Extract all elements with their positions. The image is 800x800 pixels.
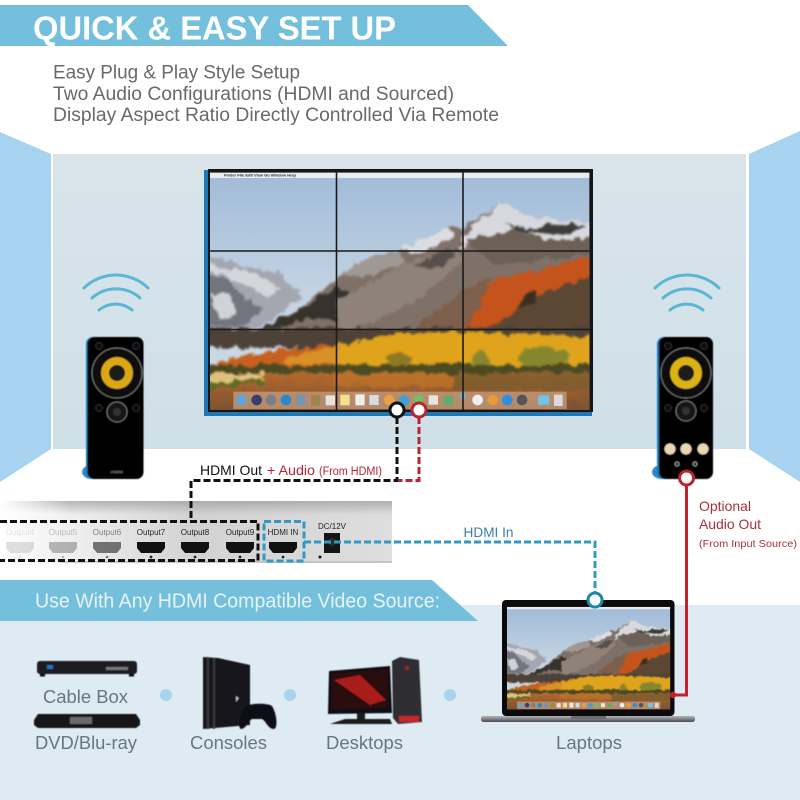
feature list: Display Aspect Ratio Directly Controlled Via Remote [53,105,499,126]
output ports: HDMI IN [268,528,299,537]
icon: right wireless signal [655,275,719,310]
label: laptops: Laptops [556,733,622,753]
output ports: Output7 [137,528,166,537]
connector: laptop HDMI node [588,593,602,607]
bottom panel [0,605,800,800]
output ports: Output9 [226,528,255,537]
label: optional audio out: (From Input Source) [699,538,797,550]
connector: audio node [412,403,426,417]
HDMI switch [0,501,392,563]
label: HDMI out plus audio: HDMI Out [200,462,262,478]
label: desktops: Desktops [326,733,403,753]
left speaker: creative [111,470,123,474]
separator dot [160,689,172,701]
title: QUICK & EASY SET UP [33,10,396,48]
icon: DVD player [34,714,140,728]
icon: desktop computer [328,657,422,724]
feature list: Easy Plug & Play Style Setup [53,62,300,84]
menu bar text: Finder File Edit View Go Window Help [224,172,296,178]
optional audio wiring [673,485,686,695]
feature list: Two Audio Configurations (HDMI and Sourced) [53,84,454,105]
video wall display [193,169,610,420]
label: HDMI out plus audio [200,462,382,478]
HDMI in highlight and wiring [264,522,595,593]
label: optional audio out: Audio Out [699,516,761,532]
connector: laptop audio dot [670,692,676,698]
label: cable box: Cable Box [43,687,128,707]
label: optional audio out: Optional [699,498,751,514]
sources banner [0,580,478,621]
icon: left wireless signal [84,275,148,310]
connector: HDMI out node [390,403,404,417]
left speaker [82,337,144,479]
label: HDMI out plus audio: (From HDMI) [319,466,382,478]
output ports: Output8 [181,528,210,537]
output ports [6,528,299,558]
output ports: Output4 [6,528,35,537]
separator dot [444,689,456,701]
output ports: Output5 [49,528,78,537]
separator dot [284,689,296,701]
sources heading: Use With Any HDMI Compatible Video Source: [35,590,440,612]
feature list [53,62,499,126]
DC power jack [318,522,347,558]
label: DVD/Blu-ray: DVD/Blu-ray [35,733,137,753]
label: HDMI out plus audio: + Audio [267,462,315,478]
audio from HDMI wiring [398,417,419,480]
right speaker [652,337,713,479]
room illustration [0,131,800,482]
HDMI out wiring [0,417,397,560]
DC power jack: DC/12V [318,522,347,531]
icon: laptop [481,600,695,722]
connector: speaker audio node [680,471,694,485]
label: consoles: Consoles [190,733,267,753]
output ports: Output6 [93,528,122,537]
title banner [0,5,508,48]
label: HDMI in: HDMI In [464,524,514,540]
icon: game console [203,657,276,729]
label: optional audio out [699,498,797,550]
icon: cable box [37,661,137,676]
